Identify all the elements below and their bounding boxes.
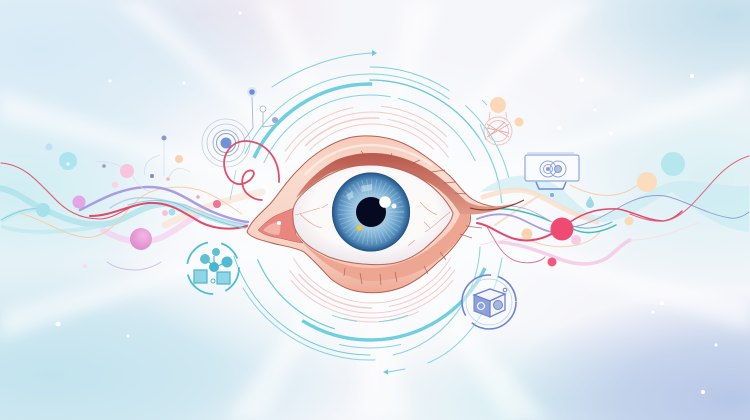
ribbon: lower teal [3,210,100,232]
line: teal [1,200,245,228]
upper lid highlight [305,145,432,175]
iris [332,172,410,252]
highlights [379,196,391,208]
iris glints [346,184,372,200]
left dots and bubbles [36,136,221,268]
ribbon: peach [165,192,262,225]
arrow: top arc [272,50,377,87]
line: red [1,163,247,229]
line: lower purple [107,262,161,270]
line: orange [20,187,242,237]
icon: network circle [187,242,239,294]
red loop line [224,141,279,200]
line: purple [80,187,248,222]
ribbon: right light teal band [480,176,749,232]
lower lid band [300,214,470,281]
line: red [477,223,553,240]
icon: monitor [525,153,579,197]
ribbon: pink [103,216,197,242]
ribbon: pink [500,240,630,264]
concentric pink arcs [262,102,482,322]
line: orange [530,182,645,247]
ribbon: light teal [0,188,245,226]
pupil [356,197,386,227]
icon: light bulb [480,100,512,145]
upper lid shadow band [296,153,518,215]
eye [247,136,524,293]
eyelid skin [247,136,496,293]
line: teal [477,209,616,232]
line: purple [477,214,552,232]
sclera [293,165,453,265]
concentric teal arcs [222,50,518,374]
right ribbons [477,156,749,264]
right dots and bubbles [490,97,685,266]
lashes [344,151,482,285]
arrow: bottom arc [383,369,405,374]
left ribbons [0,163,262,270]
ribbon: peach [483,190,597,222]
target icon with stem [202,87,278,200]
caruncle [258,208,303,243]
icon: cube circle [462,275,516,329]
veins [295,202,450,246]
